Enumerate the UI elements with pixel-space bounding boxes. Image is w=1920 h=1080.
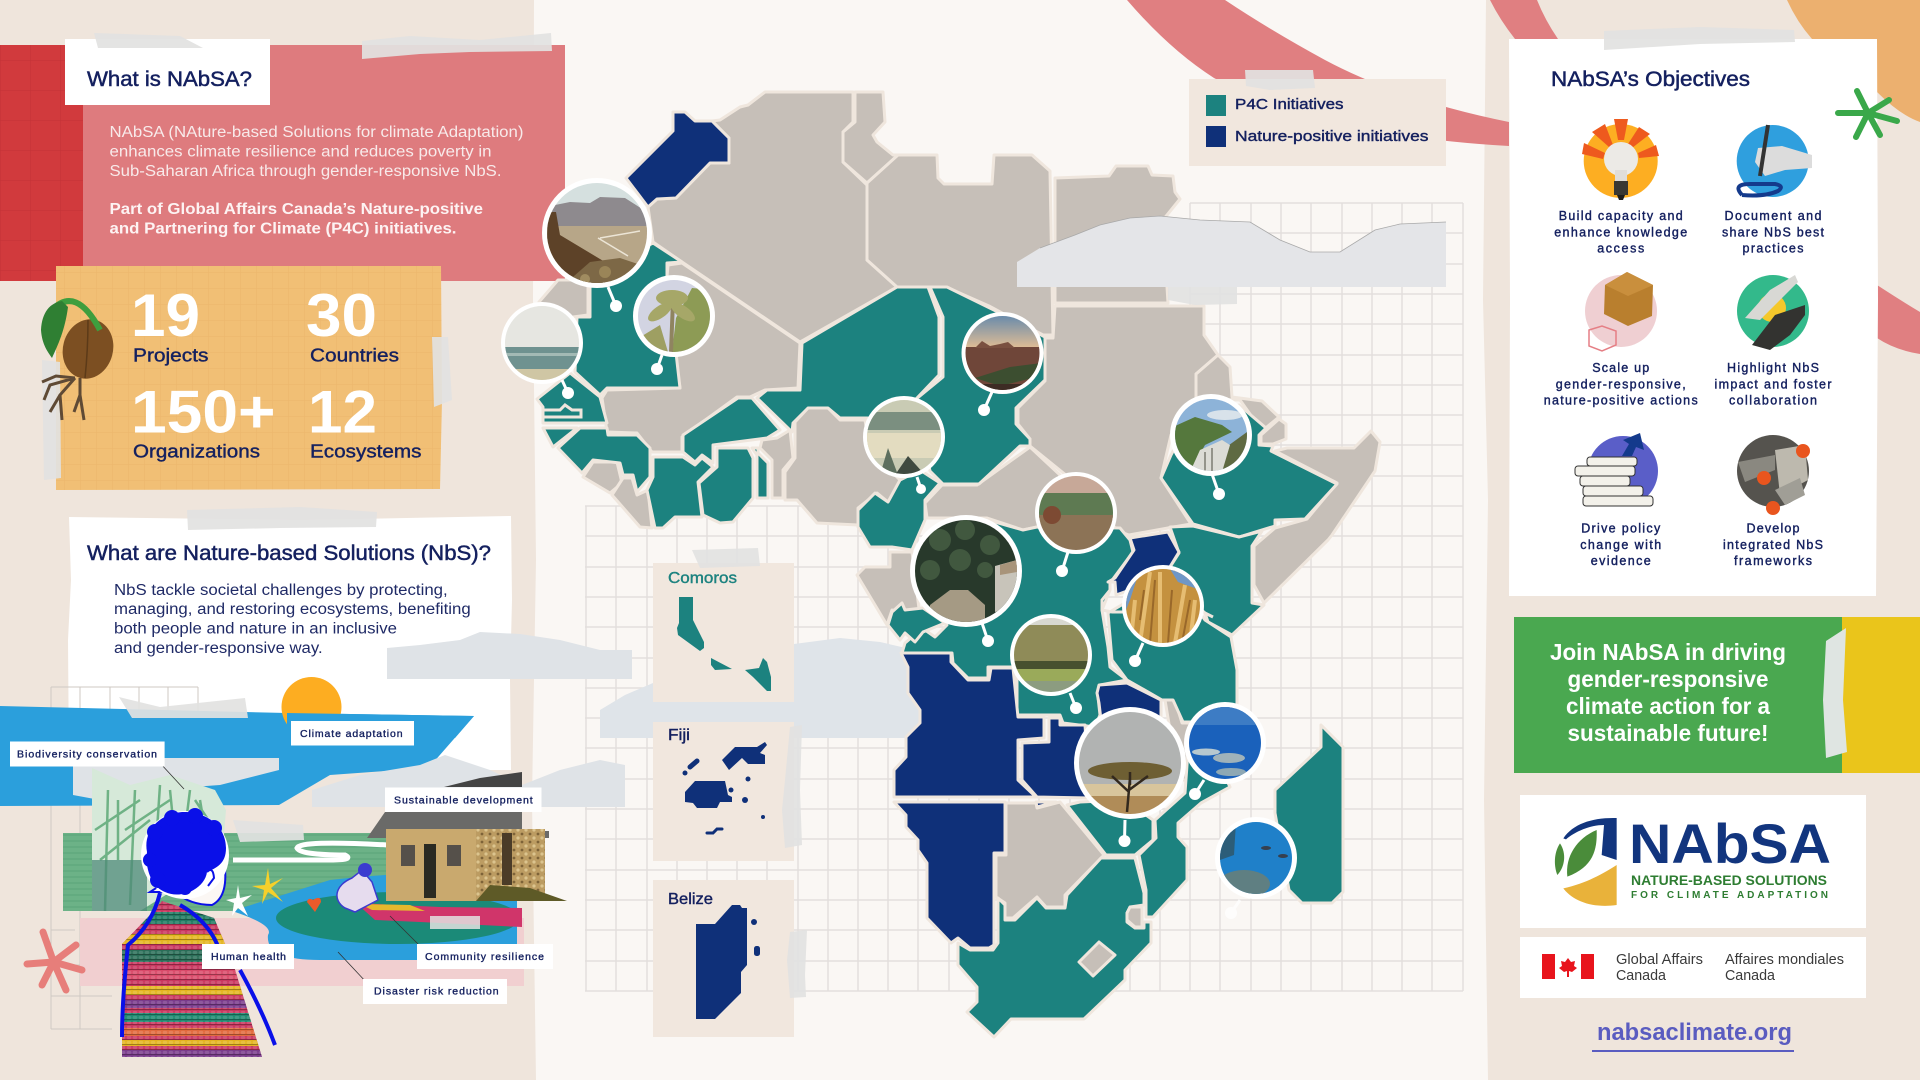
description: and gender-responsive way. [114, 640, 323, 657]
map grid [585, 203, 1463, 991]
objective text: build capacity [1554, 209, 1687, 256]
stat: countries: Countries [310, 346, 399, 366]
icon: reaching hands [1737, 275, 1809, 350]
panel: objectives [1509, 27, 1878, 596]
description [114, 582, 471, 657]
small border lines [543, 405, 1213, 617]
panel: call to action: gender-responsive [1568, 666, 1768, 692]
panel: call to action: sustainable future! [1568, 720, 1768, 746]
stat: projects: 19 [131, 282, 200, 349]
stat: organizations: Organizations [133, 442, 260, 462]
location photo: dolphins [1184, 702, 1266, 784]
inset: Belize: Belize [668, 891, 713, 908]
location photo: grassland [1010, 614, 1092, 696]
teal countries: P4C initiatives [537, 243, 1343, 1037]
stat: ecosystems [308, 378, 422, 462]
label: disaster risk reduction [363, 979, 507, 1004]
label: human health: Human health [211, 951, 286, 963]
label: biodiversity conservation: Biodiversity conservation [17, 748, 157, 760]
legend swatch: nature-positive [1206, 126, 1226, 147]
crouching figure [337, 870, 378, 912]
panel: call to action: climate action for a [1566, 693, 1770, 719]
pin: red desert [978, 392, 992, 416]
panel: key statistics [42, 266, 452, 490]
stat: projects: Projects [133, 346, 208, 366]
objective text: highlight: Highlight NbS [1727, 361, 1819, 375]
white flower [226, 885, 252, 916]
text: French name: Canada [1725, 967, 1776, 984]
label: community resilience: Community resilience [425, 951, 544, 963]
panel: What is NAbSA [0, 33, 565, 281]
stat: ecosystems: Ecosystems [310, 442, 422, 462]
heart [307, 898, 321, 912]
objective text: develop: frameworks [1734, 554, 1812, 568]
blue river band [0, 706, 474, 806]
yellow flower [252, 868, 283, 904]
label: sustainable development [385, 788, 542, 812]
panel: What are Nature-based Solutions [68, 507, 512, 770]
location photo: savanna hills [1035, 472, 1117, 554]
objective text: build capacity: Build capacity and [1559, 209, 1683, 223]
rug [356, 903, 522, 927]
trees [92, 768, 226, 911]
icon: Canadian flag [1542, 954, 1594, 979]
location photo: wheat [1122, 565, 1204, 647]
description: NbS tackle societal challenges by protecting, [114, 582, 448, 599]
objective text: highlight [1714, 361, 1832, 408]
text: English name [1616, 951, 1703, 984]
inset: Comoros [653, 548, 794, 702]
objective text: highlight: collaboration [1729, 394, 1817, 408]
torn paper behind insets [600, 638, 930, 738]
torn paper on NbS panel [387, 632, 632, 679]
legend label: P4C: P4C Initiatives [1235, 96, 1344, 113]
objective text: scale up: nature-positive actions [1544, 394, 1698, 408]
legend label: nature-positive: Nature-positive initiatives [1235, 128, 1428, 145]
pin: grassland [1070, 693, 1082, 714]
objective text: document [1722, 209, 1825, 256]
inset: Fiji: Fiji [668, 727, 690, 744]
icon: light bulb [1582, 119, 1659, 200]
pin: palm trees [651, 355, 663, 375]
inset: Fiji [653, 722, 802, 861]
description: both people and nature in an inclusive [114, 620, 397, 638]
text: French name [1725, 951, 1844, 984]
stat: projects [131, 282, 208, 366]
icon: stack of books [1575, 433, 1658, 506]
pin: waterfall [1212, 474, 1225, 500]
pin: dolphins [1189, 780, 1204, 800]
objective text: document: share NbS best [1722, 226, 1825, 240]
objective text: drive policy: change with [1580, 538, 1661, 552]
house [367, 772, 567, 901]
label: sustainable development: Sustainable development [394, 794, 533, 806]
legend [1189, 70, 1446, 166]
location photo: coral reef [1215, 817, 1297, 899]
crouching figure head [358, 863, 372, 877]
partnership statement: and Partnering for Climate (P4C) initiatives. [110, 220, 456, 238]
label: human health [202, 944, 294, 969]
pin: wheat [1129, 643, 1143, 667]
torn paper over map [1017, 216, 1446, 287]
text: English name: Global Affairs [1616, 951, 1703, 968]
location photo: red desert [962, 312, 1044, 397]
panel: call to action: Join NAbSA in driving [1550, 639, 1786, 665]
pin: coral reef [1225, 900, 1240, 919]
icon: hands connecting nodes [1737, 435, 1810, 515]
right background panel [1483, 0, 1920, 1080]
icon: sprouting seed [41, 301, 120, 420]
background arcs [1127, 0, 1920, 354]
person with woven shawl [122, 808, 275, 1057]
torn paper strips [73, 758, 279, 800]
text: English name: Canada [1616, 967, 1667, 984]
location photo: sea [501, 302, 583, 384]
teal island [276, 892, 520, 944]
objective text: highlight: impact and foster [1714, 378, 1832, 392]
location photo: misty valley [863, 396, 945, 478]
description [110, 124, 524, 180]
objective text: document: Document and [1724, 209, 1822, 223]
heading: What are Nature-based Solutions (NbS)? [87, 541, 491, 565]
location photo: palm trees [633, 275, 715, 357]
label: biodiversity conservation [10, 742, 165, 766]
sun [282, 677, 342, 737]
objective text: drive policy: Drive policy [1581, 522, 1661, 536]
stat: countries: 30 [306, 282, 377, 349]
objective text: build capacity: enhance knowledge [1554, 226, 1687, 240]
partnership statement: Part of Global Affairs Canada’s Nature-positive [110, 201, 483, 218]
location photo: waterfall [1170, 394, 1252, 476]
logo tagline: NATURE-BASED SOLUTIONS [1631, 873, 1827, 888]
callout lines [160, 763, 421, 983]
pink ground [80, 918, 524, 986]
description: NAbSA (NAture-based Solutions for climate Adaptation) [110, 124, 524, 141]
inset: Belize [653, 880, 807, 1037]
water [232, 873, 517, 960]
pink flower [27, 932, 82, 990]
text: French name: Affaires mondiales [1725, 951, 1844, 968]
heading: What is NAbSA? [87, 68, 252, 91]
objective text: drive policy: evidence [1591, 554, 1651, 568]
heading: NAbSA’s Objectives [1551, 68, 1750, 91]
pin: misty valley [916, 477, 926, 494]
inset: Comoros: Comoros [668, 570, 737, 587]
logo mark [1555, 818, 1617, 906]
label: climate adaptation: Climate adaptation [300, 728, 403, 740]
objective text: scale up [1544, 361, 1698, 408]
label: community resilience [417, 944, 553, 969]
label: disaster risk reduction: Disaster risk reduction [374, 986, 499, 998]
partnership statement [110, 201, 483, 238]
objective text: scale up: gender-responsive, [1556, 378, 1686, 392]
grey enclaves [1079, 907, 1142, 976]
pin: acacia tree [1118, 820, 1130, 847]
objective text: develop: integrated NbS [1723, 538, 1823, 552]
location photo: acacia tree [1074, 707, 1186, 819]
panel: NAbSA logo [1520, 795, 1866, 928]
icon: green flower [1838, 91, 1897, 137]
objective text: document: practices [1742, 242, 1804, 256]
objective text: build capacity: access [1597, 242, 1644, 256]
illustration: nature-based solutions collage [0, 677, 625, 1057]
legend swatch: P4C [1206, 95, 1226, 116]
panel: call to action [1514, 617, 1920, 773]
logo tagline second line: FOR CLIMATE ADAPTATION [1631, 890, 1828, 901]
navy countries: Nature-positive initiatives [626, 112, 1179, 948]
description: Sub-Saharan Africa through gender-responsive NbS. [110, 163, 501, 180]
objective text: scale up: Scale up [1592, 361, 1649, 375]
location photo: forest [910, 515, 1022, 627]
left background panel [0, 0, 536, 1080]
objective text: drive policy [1580, 522, 1661, 568]
stat: countries [306, 282, 399, 366]
description: enhances climate resilience and reduces poverty in [110, 144, 492, 160]
objective text: develop [1723, 522, 1823, 568]
pin: forest [982, 623, 994, 647]
website link: nabsaclimate.org [1597, 1019, 1792, 1046]
label: climate adaptation [291, 721, 414, 746]
stat: ecosystems: 12 [308, 378, 377, 446]
grey countries [539, 92, 1380, 918]
pin: sea [562, 380, 574, 399]
icon: hand with pen [1737, 125, 1812, 197]
tape under torn paper [1168, 287, 1237, 305]
logo wordmark: NAbSA [1629, 812, 1831, 875]
stat: organizations: 150+ [131, 378, 276, 446]
river [233, 843, 387, 860]
map of Africa [537, 92, 1380, 1037]
green field [63, 833, 387, 911]
panel: Global Affairs Canada [1520, 937, 1866, 998]
description: managing, and restoring ecosystems, benefiting [114, 601, 471, 618]
location photo: coastal mountain [542, 178, 655, 290]
objective text: develop: Develop [1746, 522, 1800, 536]
pin: savanna hills [1056, 552, 1068, 577]
icon: cardboard box [1585, 272, 1657, 351]
pin: coastal mountain [608, 287, 622, 312]
